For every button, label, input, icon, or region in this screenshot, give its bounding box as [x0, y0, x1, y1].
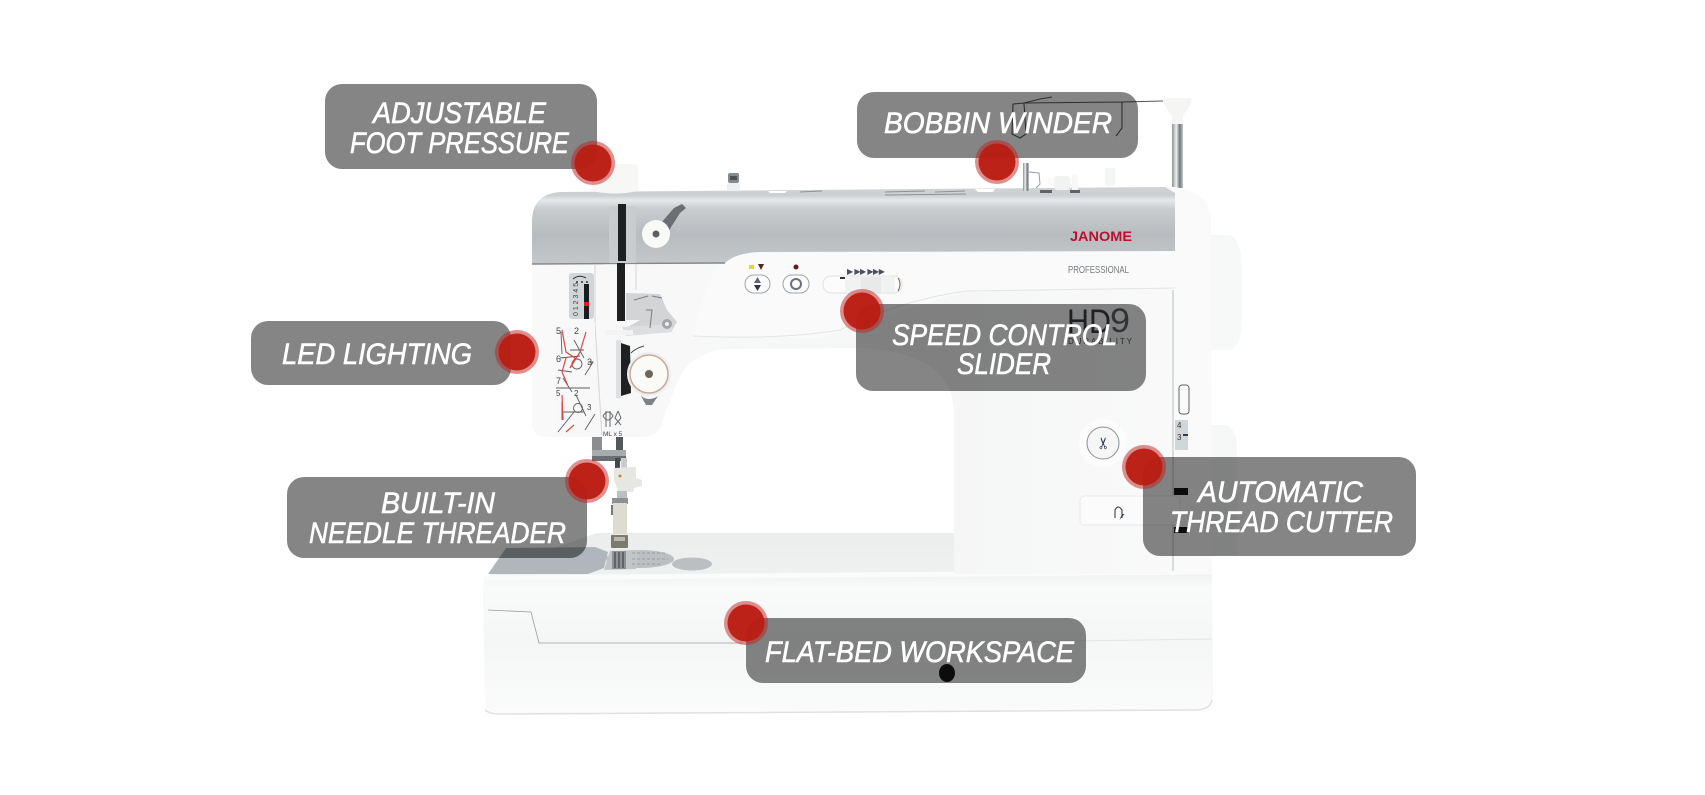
- sewing machine illustration: [483, 97, 1242, 714]
- needle up down button: [745, 275, 770, 293]
- PROFESSIONAL label: PROFESSIONAL: [1068, 264, 1129, 276]
- callout: bobbin winder: BOBBIN WINDER: [884, 107, 1112, 140]
- callout: flat-bed workspace: [724, 601, 1086, 683]
- tension knob on band: [642, 204, 686, 248]
- threading diagram: 2: [574, 326, 579, 336]
- callout: speed control slider: [840, 289, 1146, 391]
- threading diagram: 5: [556, 389, 561, 398]
- thread cutter button: ✂: [1096, 436, 1113, 450]
- tension slot: [616, 340, 631, 398]
- threading diagram: 3: [587, 403, 592, 412]
- callout: built-in needle threader: BUILT-IN: [381, 487, 495, 520]
- thread tension dial: [627, 346, 671, 405]
- threading diagram: 3: [587, 357, 592, 367]
- speed arrows: ▶ ▶▶ ▶▶▶: [847, 267, 886, 276]
- grey top band: [532, 187, 1175, 264]
- needle symbols: [603, 411, 623, 438]
- needle bar and presser foot: [592, 437, 642, 548]
- stitch length window: 3: [1177, 433, 1182, 442]
- reverse lever: [1080, 496, 1180, 525]
- thread guide mechanism: [605, 293, 677, 336]
- needle plate: [604, 550, 674, 570]
- callout: flat-bed workspace: FLAT-BED WORKSPACE: [765, 636, 1075, 669]
- JANOME logo: JANOME: [1070, 228, 1132, 244]
- stitch indicator: [1179, 385, 1189, 414]
- bobbin winder parts: [1023, 163, 1115, 193]
- tension gauge: 0 1 2 3 4 5: [573, 283, 580, 316]
- thread stand: [1012, 97, 1192, 188]
- front head panel seam: [595, 264, 636, 436]
- callout: adjustable foot pressure: FOOT PRESSURE: [350, 127, 570, 160]
- callout: LED lighting: LED LIGHTING: [282, 338, 472, 371]
- top screw: [727, 173, 740, 191]
- threading diagram: 2: [574, 389, 579, 398]
- column seam: [1172, 290, 1174, 571]
- threading diagram: 5: [556, 326, 561, 336]
- lower side knob: [1205, 425, 1237, 555]
- thread take-up slot panel: [604, 204, 650, 324]
- threading diagram: 6: [556, 354, 561, 364]
- callout: automatic thread cutter: [1122, 445, 1416, 556]
- callout: speed control slider: SPEED CONTROL: [892, 319, 1117, 352]
- foot pressure knob: [592, 164, 638, 194]
- callout: speed control slider: SLIDER: [957, 348, 1051, 381]
- callout: adjustable foot pressure: ADJUSTABLE: [371, 97, 547, 130]
- bed screw: [939, 664, 955, 682]
- thread cutter button: [1079, 419, 1127, 467]
- speed slider: [823, 276, 902, 293]
- tension gauge: [569, 273, 594, 319]
- resume indicators: [749, 264, 798, 270]
- HD9 logo: [1067, 302, 1133, 346]
- needle symbols: ML x 5: [603, 431, 623, 438]
- threading diagram: 7: [556, 376, 561, 386]
- stitch length window: [1175, 420, 1188, 450]
- callout: automatic thread cutter: THREAD CUTTER: [1170, 506, 1393, 539]
- callout: adjustable foot pressure: [325, 84, 615, 185]
- callout: LED lighting: [251, 321, 539, 385]
- thread spool button: [783, 275, 809, 293]
- callout: bobbin winder: [857, 92, 1138, 184]
- machine body: [532, 187, 1212, 574]
- machine base: [483, 533, 1213, 714]
- callout: automatic thread cutter: AUTOMATIC: [1196, 476, 1363, 509]
- callout: built-in needle threader: NEEDLE THREADER: [309, 517, 566, 550]
- stitch length window: 4: [1177, 421, 1182, 430]
- threading diagram: [555, 322, 595, 434]
- HD9 logo: DURABILITY: [1068, 337, 1133, 346]
- speed panel: [693, 252, 1188, 338]
- HD9 logo: HD: [1067, 303, 1111, 341]
- top markings: [768, 189, 995, 195]
- black side marks: [1174, 488, 1188, 533]
- grey accessory plate: [488, 547, 608, 574]
- hand wheel: [1205, 235, 1242, 350]
- callout: built-in needle threader: [287, 459, 609, 558]
- bobbin cover disc: [672, 558, 712, 570]
- HD9 logo: 9: [1110, 302, 1130, 340]
